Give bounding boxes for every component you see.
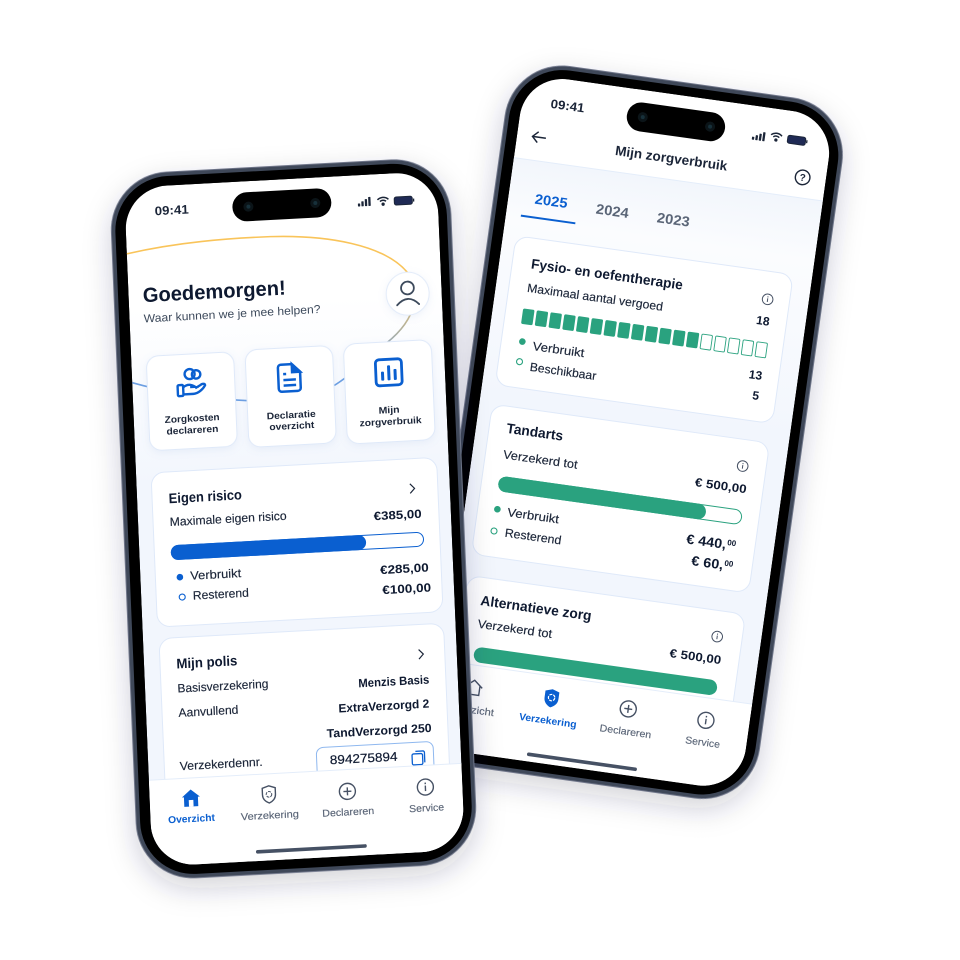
legend <box>490 506 562 544</box>
home indicator <box>527 752 637 771</box>
screen title: Mijn zorgverbruik <box>614 143 729 174</box>
legend: Verbruikt <box>190 566 242 583</box>
back arrow <box>532 131 547 144</box>
tab: verzekering <box>240 784 299 823</box>
tile: declaratie overzicht <box>245 345 336 447</box>
phone: overzicht <box>108 156 479 881</box>
tab: overzicht <box>471 679 494 716</box>
card: tandarts: Tandarts <box>506 420 564 444</box>
tab: service <box>408 778 445 815</box>
legend <box>516 338 762 400</box>
info icon <box>762 293 774 305</box>
year tabs: 2025 <box>534 191 569 211</box>
legend: Resterend <box>504 526 562 547</box>
amounts: € 440, <box>685 531 727 552</box>
tab: verzekering active: Verzekering <box>518 712 577 731</box>
card: eigen risico <box>151 457 443 627</box>
tile: zorgkosten declareren: declareren <box>166 424 219 438</box>
help icon <box>794 169 811 186</box>
dynamic island <box>232 188 332 222</box>
amounts: €100,00 <box>382 580 432 597</box>
icon: document <box>278 364 301 392</box>
status time: 09:41 <box>154 203 189 218</box>
tab: overzicht active: Overzicht <box>168 813 216 826</box>
amounts: € 60, <box>690 553 724 572</box>
screen <box>464 79 830 786</box>
screen <box>124 171 465 870</box>
year tabs <box>520 194 690 226</box>
status time: 09:41 <box>550 97 585 115</box>
legend: Verbruikt <box>532 339 586 360</box>
greeting <box>144 280 320 322</box>
block progress <box>521 308 768 358</box>
card: alternatieve zorg: Verzekerd tot <box>477 617 554 641</box>
card: eigen risico: Eigen risico <box>168 486 242 506</box>
greeting: Waar kunnen we je mee helpen? <box>144 304 321 325</box>
card: tandarts: Verzekerd tot <box>502 447 579 472</box>
legend: 5 <box>751 388 760 403</box>
progress bar <box>497 476 743 525</box>
card: alternatieve zorg: € 500,00 <box>669 646 722 667</box>
tab: overzicht active <box>167 788 216 826</box>
tab: service: Service <box>409 802 445 815</box>
legend: Beschikbaar <box>529 360 597 383</box>
tile: declaratie overzicht: Declaratie <box>267 409 316 422</box>
progress bar <box>473 646 718 696</box>
tab: overzicht: Overzicht <box>446 702 495 719</box>
card: mijn polis: Mijn polis <box>176 652 238 672</box>
card: alternatieve zorg <box>467 576 744 701</box>
legend <box>176 566 249 603</box>
tab: verzekering: Verzekering <box>241 809 299 823</box>
tab bar <box>149 763 465 870</box>
policy number field: 894275894 <box>330 750 398 767</box>
tile: zorgkosten declareren: Zorgkosten <box>164 412 220 426</box>
card: tandarts: € 500,00 <box>694 475 748 496</box>
legend: Verbruikt <box>506 505 561 526</box>
card: mijn polis: TandVerzorgd 250 <box>326 721 432 741</box>
phone: mijn zorgverbruik <box>414 58 850 807</box>
card: mijn polis: Aanvullend <box>178 703 239 720</box>
tab: declareren: Declareren <box>322 806 374 820</box>
status icons <box>752 132 808 146</box>
card: mijn polis <box>159 623 451 808</box>
decorative curve <box>126 229 419 408</box>
card: mijn polis: ExtraVerzorgd 2 <box>338 697 430 715</box>
card: eigen risico: €385,00 <box>373 507 422 523</box>
avatar button <box>385 271 430 316</box>
card: fysio: Fysio- en oefentherapie <box>530 256 684 293</box>
home indicator <box>256 844 367 854</box>
help icon: ? <box>799 173 806 184</box>
year tabs: 2023 <box>656 209 691 230</box>
card: alternatieve zorg: Alternatieve zorg <box>480 592 593 624</box>
chevron <box>410 484 415 493</box>
greeting: Goedemorgen! <box>142 277 286 307</box>
phone frame <box>108 156 479 881</box>
card: eigen risico: Maximale eigen risico <box>169 509 287 529</box>
chevron <box>419 649 424 659</box>
policy number field <box>316 741 435 793</box>
year tabs: 2024 <box>595 201 630 221</box>
amounts: 00 <box>724 559 734 569</box>
tab bar <box>470 664 752 786</box>
progress bar <box>171 532 424 560</box>
tab: declareren <box>321 782 374 820</box>
card: fysio: Maximaal aantal vergoed <box>526 281 664 314</box>
status icons <box>358 196 414 206</box>
tab: service: Service <box>684 735 721 751</box>
card: fysio <box>495 236 793 424</box>
tab: declareren <box>600 700 651 738</box>
legend: 13 <box>748 367 763 383</box>
amounts <box>380 560 432 597</box>
tile: mijn zorgverbruik <box>343 339 435 444</box>
icon: copy <box>412 751 425 765</box>
info icon <box>737 460 749 472</box>
dynamic island <box>625 101 727 143</box>
card: mijn polis: Menzis Basis <box>358 672 430 690</box>
icon: bar chart <box>375 359 402 386</box>
card: mijn polis: Verzekerdennr. <box>179 755 263 773</box>
amounts: 00 <box>727 538 737 548</box>
tab: service <box>686 712 720 748</box>
tab: verzekering active <box>520 689 576 730</box>
card: mijn polis: Basisverzekering <box>177 677 269 696</box>
tab: declareren: Declareren <box>599 723 652 741</box>
icon: hand with coins <box>177 368 205 396</box>
tile: mijn zorgverbruik: Mijn <box>378 405 400 417</box>
amounts: €285,00 <box>380 560 429 577</box>
tile: zorgkosten declareren <box>146 352 237 451</box>
legend: Resterend <box>193 586 249 603</box>
amounts <box>686 534 736 572</box>
card: fysio: 18 <box>755 313 771 329</box>
tile: declaratie overzicht: overzicht <box>269 420 315 433</box>
card: tandarts <box>471 404 770 593</box>
info icon <box>711 631 723 643</box>
tile: mijn zorgverbruik: zorgverbruik <box>359 415 423 429</box>
phone frame <box>414 58 850 807</box>
